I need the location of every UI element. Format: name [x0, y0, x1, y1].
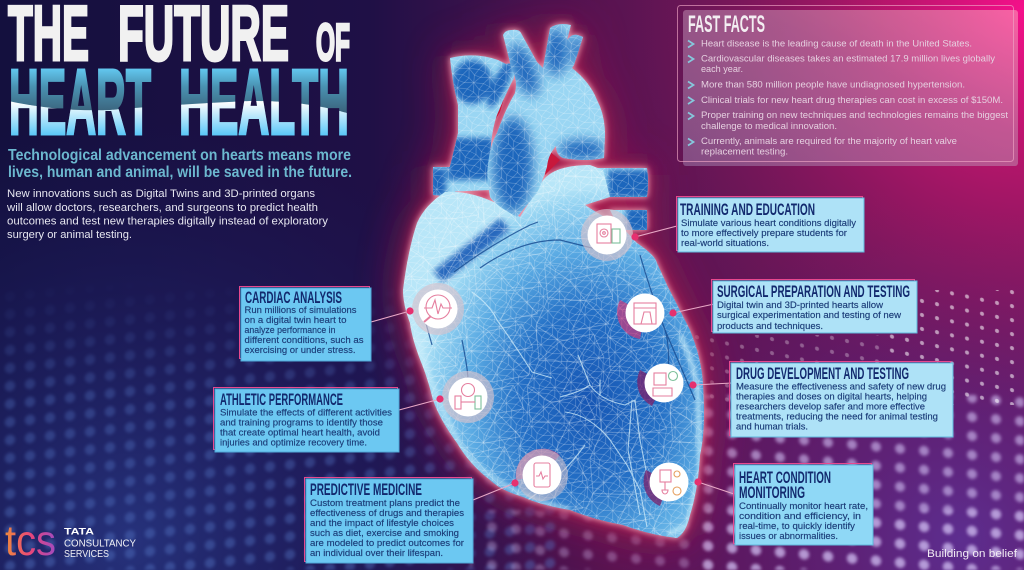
callout: athletic performance: Simulate the effects of different activities: [220, 406, 392, 418]
callout: training and education: real-world situations.: [681, 237, 769, 248]
callout: heart condition monitoring: condition and efficiency, in: [739, 510, 861, 521]
callout: cardiac analysis: analyze performance in: [244, 324, 336, 335]
callout: cardiac analysis: CARDIAC ANALYSIS: [245, 288, 342, 307]
icon: heart condition monitoring: [644, 462, 702, 506]
callout: training and education: [676, 196, 864, 252]
title: HEART: [9, 50, 151, 154]
callout: predictive medicine: [304, 478, 473, 563]
heart illustration: [400, 24, 710, 550]
fast facts list: Heart disease is the leading cause of death in the United States.: [701, 38, 972, 50]
title: [8, 4, 350, 136]
fast facts list: [701, 38, 1008, 158]
aorta: [485, 24, 610, 220]
callout: heart condition monitoring: [734, 464, 873, 545]
subheading: lives, human and animal, will be saved in the future.: [8, 164, 352, 181]
fast facts chevrons: [688, 40, 694, 146]
fast facts list: challenge to medical innovation.: [701, 121, 837, 132]
callout: predictive medicine: and the impact of lifestyle choices: [310, 517, 454, 528]
fast facts list: Currently, animals are required for the majority of heart valve: [701, 136, 957, 147]
subheading: [8, 147, 352, 181]
intro text: outcomes and test new therapies digitally instead of exploratory: [7, 216, 328, 228]
subheading: Technological advancement on hearts means more: [8, 147, 351, 164]
callout: surgical preparation and testing: Digital twin and 3D-printed hearts allow: [717, 299, 883, 310]
icon: training: [581, 209, 639, 261]
text: HEALTH: [179, 50, 349, 154]
fast facts list: Clinical trials for new heart drug therapies can cost in excess of $150M.: [701, 95, 1003, 106]
callout: drug development and testing: treatments, reducing the need for animal testing: [736, 410, 938, 422]
callout: cardiac analysis: exercising or under stress.: [244, 344, 356, 355]
icon: predictive medicine: [511, 449, 568, 501]
callout: training and education: Simulate various heart conditions digitally: [681, 217, 856, 228]
tagline: Building on belief: [927, 548, 1018, 560]
callout: athletic performance: that create optimal heart health, avoid: [220, 426, 380, 438]
fast facts list: More than 580 million people have undiagnosed hypertension.: [701, 80, 965, 90]
callout: drug development and testing: and human trials.: [736, 420, 808, 432]
fast facts heading: FAST FACTS: [688, 11, 765, 38]
callout: drug development and testing: researchers develop safer and more effective: [736, 400, 925, 412]
fast facts list: Proper training on new techniques and technologies remains the biggest: [701, 110, 1008, 121]
heart vessels behind: [433, 55, 648, 230]
callout: training and education: TRAINING AND EDUCATION: [680, 200, 815, 219]
callout: surgical preparation and testing: products and techniques.: [717, 320, 823, 331]
intro text: surgery or animal testing.: [7, 229, 132, 241]
callout: drug development and testing: Measure the effectiveness and safety of new drug: [736, 380, 946, 392]
icon: surgical preparation: [617, 294, 677, 339]
callout: cardiac analysis: Run millions of simulations: [244, 304, 357, 315]
callout: heart condition monitoring: MONITORING: [739, 483, 805, 502]
callout: training and education: to more effectively prepare students for: [681, 227, 847, 238]
callout: cardiac analysis: different conditions, such as: [244, 334, 364, 345]
logo: tcs: TATA: [64, 526, 94, 538]
callout: athletic performance: injuries and optimize recovery time.: [220, 436, 367, 448]
text: OF: [316, 14, 350, 72]
callout: drug development and testing: therapies and doses on digital hearts, helping: [736, 390, 927, 402]
callout: athletic performance: [214, 388, 399, 452]
callout: athletic performance: and training programs to identify those: [220, 416, 383, 428]
callout: heart condition monitoring: real-time, to quickly identify: [739, 520, 855, 531]
callout: predictive medicine: Custom treatment plans predict the: [310, 497, 460, 508]
connector lines: [371, 226, 734, 500]
callout: predictive medicine: effectiveness of drugs and therapies: [310, 507, 464, 518]
callout: predictive medicine: PREDICTIVE MEDICINE: [310, 480, 422, 499]
heart body: [400, 160, 710, 550]
callout: heart condition monitoring: issues or abnormalities.: [739, 530, 838, 541]
intro text: New innovations such as Digital Twins and 3D-printed organs: [7, 188, 315, 200]
title: HEART: [9, 50, 151, 154]
callout: cardiac analysis: [240, 286, 371, 361]
callout: surgical preparation and testing: surgical experimentation and testing of new: [717, 309, 901, 320]
text: HEALTH: [179, 50, 349, 154]
fast facts list: replacement testing.: [701, 146, 788, 158]
icon: drug development: [637, 364, 697, 406]
logo: tcs: tcs: [5, 517, 56, 565]
callout: predictive medicine: are modeled to predict outcomes for: [310, 537, 464, 548]
fast facts panel: [678, 6, 1018, 166]
icon: athletic performance: [436, 371, 494, 423]
logo: tcs: [5, 517, 136, 565]
fast facts list: Cardiovascular diseases takes an estimated 17.9 million lives globally: [701, 54, 995, 64]
intro text: will allow doctors, researchers, and surgeons to predict health: [6, 202, 318, 214]
callout: heart condition monitoring: Continually monitor heart rate,: [739, 500, 868, 511]
callout: drug development and testing: [730, 362, 953, 437]
icon: cardiac analysis: [406, 283, 464, 335]
intro text: [6, 188, 328, 241]
fast facts list: each year.: [701, 64, 743, 75]
logo: tcs: CONSULTANCY: [64, 538, 136, 550]
callout: predictive medicine: an individual over their lifespan.: [310, 547, 443, 558]
callout: cardiac analysis: on a digital twin heart to: [244, 314, 346, 325]
callout: predictive medicine: such as diet, exercise and smoking: [310, 527, 459, 538]
callout: surgical preparation and testing: [712, 280, 917, 333]
callout: heart condition monitoring: HEART CONDITION: [739, 468, 831, 487]
logo: tcs: SERVICES: [64, 548, 109, 560]
callout: athletic performance: ATHLETIC PERFORMANCE: [220, 390, 343, 409]
